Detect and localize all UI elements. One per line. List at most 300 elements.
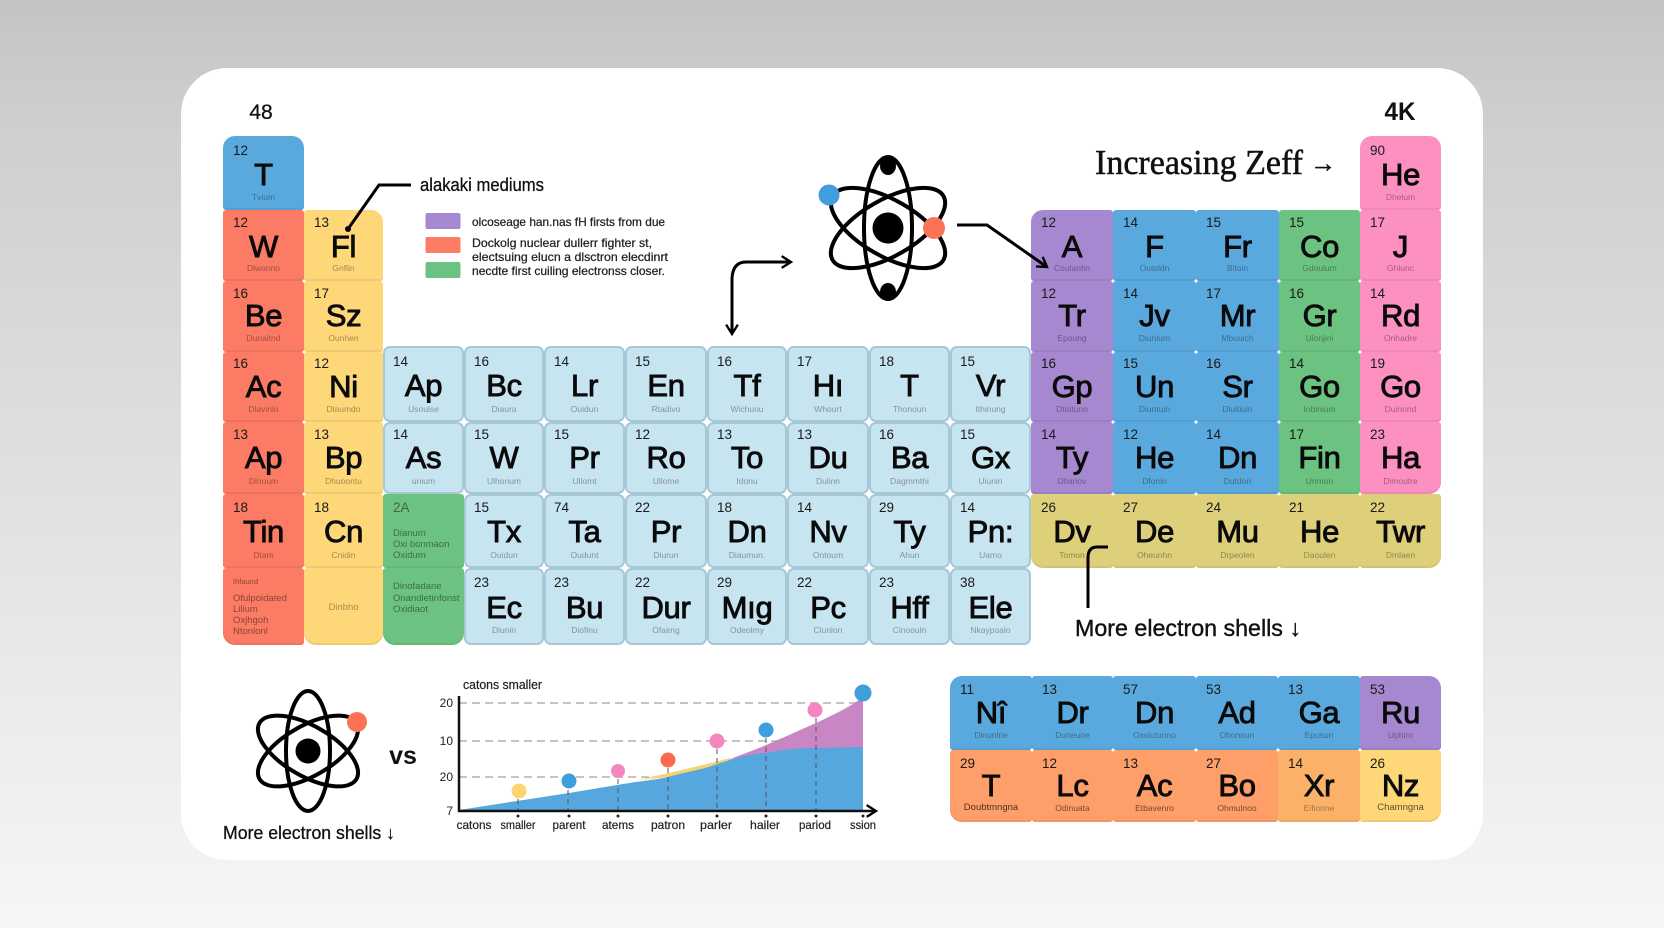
cell: Sz: 17 — [314, 286, 329, 301]
cell: As: unium — [412, 476, 435, 486]
cell: He: 90 — [1370, 143, 1385, 158]
cell: Mr: Mr — [1220, 298, 1255, 333]
cell: red text block — [223, 568, 304, 645]
cell: Rd: Rd — [1381, 298, 1420, 333]
cell: Tin — [223, 494, 304, 568]
cell: Tx — [464, 494, 544, 568]
cell: Pn: Pn: — [968, 514, 1013, 549]
cell: yellow text block — [304, 568, 383, 645]
cell: Lr — [544, 346, 625, 422]
cell: Ro: Ro — [646, 440, 686, 475]
cell: Co: Gdoulum — [1302, 263, 1337, 273]
cell: Ni: Ni — [329, 369, 358, 404]
cell: Ty purple: 14 — [1041, 427, 1056, 442]
cell: Ty light — [869, 494, 950, 568]
cell: Ta: Oudunt — [571, 550, 598, 560]
cell: As: 14 — [393, 427, 408, 442]
cell: Dn blue: Dn — [1218, 440, 1257, 475]
cell: Nv: Ontoum — [813, 550, 843, 560]
cell: Bp: 13 — [314, 427, 329, 442]
cell: Rd — [1360, 281, 1441, 352]
cell: Pr row 6: 22 — [635, 500, 650, 515]
chart x axis labels: parler — [700, 818, 732, 832]
cell: Gr: Gr — [1303, 298, 1336, 333]
chart x axis labels: hailer — [750, 818, 780, 832]
cell: As — [383, 422, 464, 494]
cell: Dur: 22 — [635, 575, 650, 590]
cell: Co: 15 — [1289, 215, 1304, 230]
cell: Dn light: Diaumun. — [729, 550, 765, 560]
cell: Mr — [1196, 281, 1279, 352]
cell: Xr: Eifionne — [1304, 803, 1334, 813]
cell: Hi: 17 — [797, 354, 812, 369]
cell: He blue — [1113, 422, 1196, 494]
cell: Ty purple: Dtianov — [1058, 476, 1086, 486]
cell: Hff: Cinoouln — [893, 625, 926, 635]
legend text: olcoseage han.nas fH firsts from due — [472, 215, 665, 229]
chart axes — [459, 696, 876, 811]
cell: Rd: 14 — [1370, 286, 1385, 301]
cell: Gr: 16 — [1289, 286, 1304, 301]
cell: Du: Du — [808, 440, 848, 475]
cell: Ad: 53 — [1206, 682, 1221, 697]
cell: Ni blue — [950, 676, 1032, 750]
cell: Mr: Mbuuich — [1221, 333, 1254, 343]
cell: Dur: Dur — [641, 590, 691, 625]
cell: Dur — [625, 568, 707, 645]
cell: En: 15 — [635, 354, 650, 369]
cell: T orange: 29 — [960, 756, 975, 771]
cell: W light: W — [490, 440, 518, 475]
cell: A: A — [1062, 229, 1082, 264]
cell: Tx: 15 — [474, 500, 489, 515]
cell: Fin — [1279, 422, 1360, 494]
cell: Mu: Drpeolen — [1220, 550, 1255, 560]
cell: He olive — [1279, 494, 1360, 568]
cell: Hi: Whourt — [814, 404, 842, 414]
cell: Cn: Cn — [324, 514, 363, 549]
cell: red text block: Ntonlonl — [233, 626, 268, 637]
cell: Bu: 23 — [554, 575, 569, 590]
cell: Mr: 17 — [1206, 286, 1221, 301]
icon: atom large — [818, 157, 957, 301]
cell: Dr: Duneune — [1055, 730, 1090, 740]
cell: Ru — [1360, 676, 1441, 750]
cell: Ni blue: Dlnunlne — [974, 730, 1008, 740]
cell: Ac orange — [1113, 750, 1196, 822]
cell: Ele: 38 — [960, 575, 975, 590]
cell: Twr: 22 — [1370, 500, 1385, 515]
cell: Ty purple — [1031, 422, 1113, 494]
cell: Co — [1279, 210, 1360, 281]
cell: Ta — [544, 494, 625, 568]
cell: Go green — [1279, 352, 1360, 422]
cell: W light: 15 — [474, 427, 489, 442]
label: vs: vs — [389, 742, 417, 770]
cell: T: 12 — [233, 143, 248, 158]
cell: He olive: He — [1300, 514, 1339, 549]
cell: Rd: Onhadre — [1384, 333, 1417, 343]
cell: Bo: Bo — [1218, 768, 1256, 803]
cell: Bu: Bu — [566, 590, 603, 625]
cell: Tin: Dtam — [253, 550, 274, 560]
cell: Fin: Fin — [1298, 440, 1341, 475]
cell: Tr: 12 — [1041, 286, 1056, 301]
cell: Ec: Ec — [486, 590, 522, 625]
cell: Ha: 23 — [1370, 427, 1385, 442]
cell: Tr — [1031, 281, 1113, 352]
cell: Ru: Uphiro — [1388, 730, 1413, 740]
cell: Pr: Ullomt — [572, 476, 597, 486]
cell: Jv — [1113, 281, 1196, 352]
cell: red text block: Ofulpoidated — [233, 593, 287, 604]
cell: Dur: Ofaimg — [652, 625, 680, 635]
cell: Ac: Ac — [246, 369, 281, 404]
cell: Bc: 16 — [474, 354, 489, 369]
cell: Ap light: Usoulse — [408, 404, 439, 414]
cell: Ec: 23 — [474, 575, 489, 590]
heading: Increasing Zeff: → — [1310, 148, 1336, 178]
callout: alakaki mediums — [345, 175, 544, 232]
cell: yellow text block: Dinbho — [328, 602, 359, 613]
cell: Go pink: 19 — [1370, 356, 1385, 371]
legend text: Dockolg nuclear dullerr fighter st, — [472, 236, 652, 250]
cell: green text block lower: Oxidiaot — [393, 604, 428, 615]
chart x axis tick dots — [516, 814, 864, 818]
cell: Ac orange: 13 — [1123, 756, 1138, 771]
cell: Mig: 29 — [717, 575, 732, 590]
cell: Mig: Mıg — [722, 590, 772, 625]
cell: Be — [223, 281, 304, 352]
cell: Dn light: Dn — [727, 514, 767, 549]
cell: Fr: 15 — [1206, 215, 1221, 230]
cell: Ba — [869, 422, 950, 494]
cell: Cn: 18 — [314, 500, 329, 515]
cell: Lc: Lc — [1056, 768, 1089, 803]
cell: Nv: 14 — [797, 500, 812, 515]
cell: Ro: 12 — [635, 427, 650, 442]
cell: Xr: 14 — [1288, 756, 1303, 771]
legend — [426, 213, 669, 278]
cell: To: 13 — [717, 427, 732, 442]
cell: He blue: He — [1135, 440, 1174, 475]
cell: Vr: Ithinung — [975, 404, 1006, 414]
chart gridlines — [459, 703, 863, 777]
cell: Dv: Tomon — [1059, 550, 1085, 560]
cell: Go green: Inbinium — [1303, 404, 1336, 414]
chart y axis labels — [440, 696, 453, 818]
cell: Fl: Gnflin — [332, 263, 355, 273]
cell: De: 27 — [1123, 500, 1138, 515]
cell: Mig — [707, 568, 787, 645]
cell: F: Outoldn — [1140, 263, 1169, 273]
cell: Du: Dulinn — [816, 476, 840, 486]
cell: Ap red: 13 — [233, 427, 248, 442]
cell: Ty light: Ahun — [900, 550, 919, 560]
cell: As: As — [406, 440, 441, 475]
cell: green text block lower — [383, 568, 464, 645]
area chart — [440, 678, 876, 832]
chart x axis labels: ssion — [850, 818, 876, 832]
cell: Ga — [1278, 676, 1360, 750]
cell: Bp: Bp — [325, 440, 362, 475]
callout: more electron shells upper: More electron shells ↓ — [1075, 615, 1301, 641]
cell: Pn: Uamo — [979, 550, 1002, 560]
corner label 48: 48 — [249, 101, 273, 124]
cell: Co: Co — [1300, 229, 1339, 264]
cell: Sr: Dluitiuin — [1222, 404, 1253, 414]
cell: Ni blue: Nî — [976, 695, 1006, 730]
cell: Vr: Vr — [976, 368, 1005, 403]
cell: He blue: Dfonin — [1142, 476, 1167, 486]
cell: Gx — [950, 422, 1031, 494]
cell: T: T — [254, 157, 273, 192]
label: more electron shells lower: More electron shells ↓ — [223, 823, 395, 843]
cell: T — [223, 136, 304, 210]
cell: green text block lower: Onandletinfonst — [393, 593, 460, 604]
cell: Fl — [304, 210, 383, 281]
cell: Gx: Gx — [971, 440, 1010, 475]
cell: Ga: Epusun — [1305, 730, 1333, 740]
legend text — [472, 215, 669, 278]
chart x axis labels: atems — [602, 818, 634, 832]
chart x axis labels — [456, 818, 876, 832]
cell: Jv: Diunlum — [1139, 333, 1170, 343]
cell: Tf: Tf — [734, 368, 760, 403]
cell: Hff — [869, 568, 950, 645]
callout: alakaki mediums: alakaki mediums — [420, 175, 544, 195]
cell: J — [1360, 210, 1441, 281]
callout: more electron shells upper — [1075, 547, 1301, 641]
cell: T orange — [950, 750, 1032, 822]
cell: Pr — [544, 422, 625, 494]
cell: Ni blue: 11 — [960, 682, 974, 697]
cell: De: De — [1135, 514, 1174, 549]
cell: Ga: Ga — [1299, 695, 1339, 730]
chart drop lines — [518, 718, 816, 810]
cell: J: 17 — [1370, 215, 1385, 230]
cell: Du: 13 — [797, 427, 812, 442]
periodic table main grid — [223, 136, 1441, 645]
chart title: catons smaller — [463, 678, 542, 692]
cell: Be: Dunaitnd — [246, 333, 281, 343]
legend swatch: purple — [426, 213, 460, 229]
chart area: blue — [459, 747, 863, 810]
chart area: pink — [728, 697, 863, 760]
cell: Fl: Fl — [331, 229, 356, 264]
cell: En: En — [647, 368, 685, 403]
cell: Dn blue: 14 — [1206, 427, 1221, 442]
cell: Ba: Dagmmthi — [890, 476, 929, 486]
legend swatch: green — [426, 262, 460, 278]
chart x axis labels: patron — [651, 818, 685, 832]
cell: Dr — [1032, 676, 1113, 750]
cell: Ap light: 14 — [393, 354, 408, 369]
legend text: necdte first cuiling electronss closer. — [472, 264, 665, 278]
cell: Pc: Pc — [810, 590, 846, 625]
cell: W: Dlwonno — [247, 263, 280, 273]
cell: Ap red: Dlnoum — [249, 476, 278, 486]
cell: Ac orange: Ac — [1137, 768, 1172, 803]
cell: De: Oheunhn — [1137, 550, 1172, 560]
cell: J: J — [1393, 229, 1408, 264]
cell: He blue: 12 — [1123, 427, 1138, 442]
cell: He olive: Daoulen — [1304, 550, 1335, 560]
cell: Dn light — [707, 494, 787, 568]
cell: Un: Diuntuin — [1139, 404, 1170, 414]
cell: Ro — [625, 422, 707, 494]
cell: Lc: 12 — [1042, 756, 1057, 771]
cell: Ele: Nkaypoalo — [970, 625, 1011, 635]
cell: Ac: Dlavinlo — [248, 404, 279, 414]
cell: Bp — [304, 422, 383, 494]
cell: Lr: 14 — [554, 354, 569, 369]
cell: Ty light: 29 — [879, 500, 894, 515]
cell: Bc: Bc — [486, 368, 522, 403]
cell: Gr — [1279, 281, 1360, 352]
cell: Dn light: 18 — [717, 500, 732, 515]
chart x axis labels: parent — [552, 818, 586, 832]
cell: To — [707, 422, 787, 494]
cell: Fr — [1196, 210, 1279, 281]
cell: W light — [464, 422, 544, 494]
cell: Ty light: Ty — [893, 514, 926, 549]
cell: green text block upper: 2A — [393, 500, 410, 515]
cell: Dn lower — [1113, 676, 1196, 750]
cell: Be: 16 — [233, 286, 248, 301]
cell: Ta: 74 — [554, 500, 569, 515]
chart area: yellow — [637, 758, 730, 780]
cell: T light — [869, 346, 950, 422]
cell: A — [1031, 210, 1113, 281]
cell: Nz: Chamngna — [1377, 802, 1424, 813]
cell: Pr row 6: Pr — [651, 514, 681, 549]
cell: Twr: Twr — [1376, 514, 1425, 549]
cell: Ap red — [223, 422, 304, 494]
cell: Go pink — [1360, 352, 1441, 422]
cell: Dn lower: 57 — [1123, 682, 1138, 697]
chart x axis labels: pariod — [799, 818, 831, 832]
cell: F: F — [1145, 229, 1164, 264]
cell: Tf: Wichuou — [730, 404, 764, 414]
cell: Hi — [787, 346, 869, 422]
chart y axis labels: 20 — [440, 696, 453, 710]
cell: Go green: 14 — [1289, 356, 1304, 371]
cell: En: Rtadivo — [652, 404, 680, 414]
cell: Ec: Dlunin — [492, 625, 516, 635]
cell: Go green: Go — [1299, 369, 1340, 404]
chart x axis labels: catons — [456, 818, 492, 832]
cell: He: He — [1381, 157, 1420, 192]
cell: Pn: 14 — [960, 500, 975, 515]
cell: De — [1113, 494, 1196, 568]
cell: Go pink: Go — [1380, 369, 1421, 404]
cell: Gr: Ulonjini — [1306, 333, 1333, 343]
cell: To: To — [731, 440, 763, 475]
cell: Ni: Dlaumdo — [326, 404, 361, 414]
cell: Pc: Clunlon — [814, 625, 842, 635]
cell: Fin: 17 — [1289, 427, 1304, 442]
cell: Fr: Fr — [1223, 229, 1252, 264]
chart y axis labels: 20 — [440, 770, 453, 784]
cell: Jv: Jv — [1139, 298, 1170, 333]
cell: He: Dhelum — [1386, 192, 1415, 202]
cell: Mu: 24 — [1206, 500, 1221, 515]
cell: Pr row 6 — [625, 494, 707, 568]
cell: Twr: Dmlaen — [1386, 550, 1415, 560]
cell: Vr: 15 — [960, 354, 975, 369]
cell: Bc — [464, 346, 544, 422]
cell: Ele: Ele — [969, 590, 1012, 625]
cell: red text block: Lilium — [233, 604, 258, 615]
cell: Gx: 15 — [960, 427, 975, 442]
cell: Sz: Sz — [326, 298, 361, 333]
cell: Sz — [304, 281, 383, 352]
cell: Xr: Xr — [1304, 768, 1334, 803]
cell: Go pink: Duinnnd — [1385, 404, 1416, 414]
cell: Dv: 26 — [1041, 500, 1056, 515]
cell: Cn — [304, 494, 383, 568]
cell: Dn lower: Dn — [1135, 695, 1174, 730]
arrow: atom to A cell — [957, 225, 1047, 267]
cell: red text block: Ihfaund — [233, 577, 258, 586]
cell: Lr: Ouidun — [571, 404, 598, 414]
icon: atom small — [247, 691, 369, 811]
cell: Bo: Ohmulnoo — [1217, 803, 1257, 813]
cell: Pr: Pr — [569, 440, 600, 475]
cell: Vr — [950, 346, 1031, 422]
cell: Un: 15 — [1123, 356, 1138, 371]
cell: Tin: Tin — [243, 514, 284, 549]
cell: J: Ghlunc — [1387, 263, 1414, 273]
cell: Gp — [1031, 352, 1113, 422]
cell: Ac: 16 — [233, 356, 248, 371]
cell: A: 12 — [1041, 215, 1056, 230]
cell: Ru: Ru — [1381, 695, 1420, 730]
cell: Ro: Ullome — [653, 476, 679, 486]
cell: Tf: 16 — [717, 354, 732, 369]
cell: Tf — [707, 346, 787, 422]
cell: Tx: Tx — [487, 514, 521, 549]
cell: Ga: 13 — [1288, 682, 1303, 697]
cell: green text block upper: Dianum — [393, 528, 426, 539]
cell: Bc: Diaura — [491, 404, 517, 414]
cell: Nv — [787, 494, 869, 568]
cell: Bo — [1196, 750, 1278, 822]
cell: Dv — [1031, 494, 1113, 568]
cell: Un: Un — [1135, 369, 1174, 404]
cell: Dn lower: Oxslutunno — [1133, 730, 1176, 740]
cell: Gp: Dtiatuno — [1056, 404, 1088, 414]
cell: Dn blue — [1196, 422, 1279, 494]
lower periodic table block — [950, 676, 1441, 822]
cell: Bo: 27 — [1206, 756, 1221, 771]
cell: Ac orange: Etbavenro — [1135, 803, 1174, 813]
cell: Ba: 16 — [879, 427, 894, 442]
cell: Sr — [1196, 352, 1279, 422]
cell: Xr — [1278, 750, 1360, 822]
cell: Lc — [1032, 750, 1113, 822]
cell: Dr: Dr — [1056, 695, 1089, 730]
cell: To: Idonu — [736, 476, 758, 486]
cell: Ap red: Ap — [245, 440, 282, 475]
cell: T light: 18 — [879, 354, 894, 369]
cell: Mu — [1196, 494, 1279, 568]
cell: Sz: Ounhen — [328, 333, 359, 343]
cell: F: 14 — [1123, 215, 1138, 230]
cell: Ru: 53 — [1370, 682, 1385, 697]
cell: Ad: Ad — [1218, 695, 1256, 730]
